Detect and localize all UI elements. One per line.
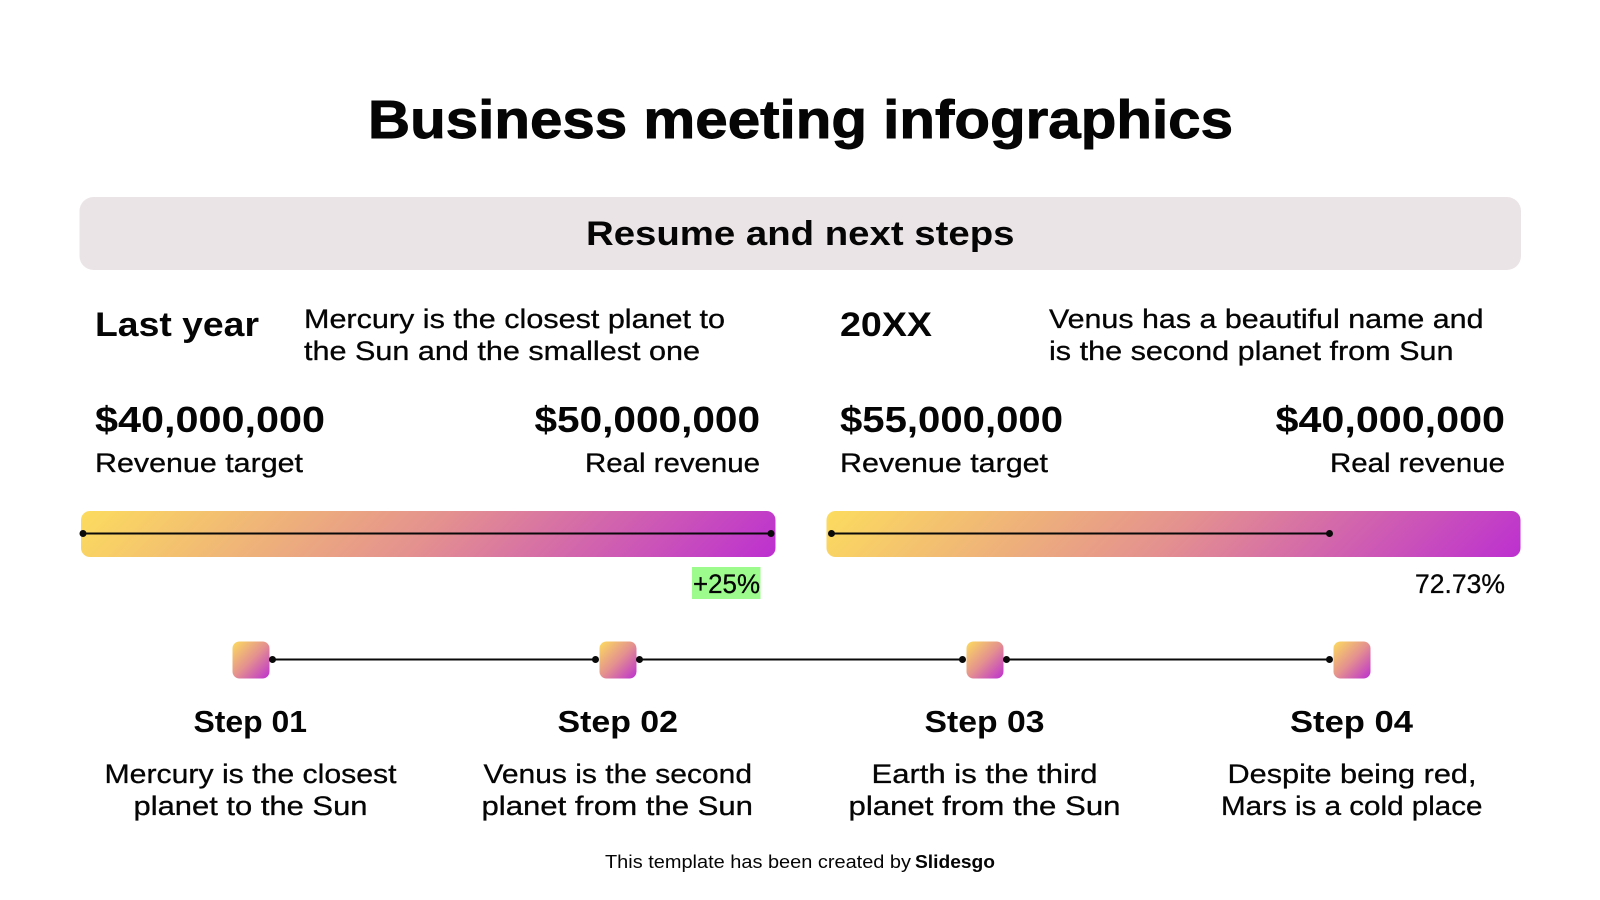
text: 20XX description (1049, 304, 1484, 366)
stat: real revenue (1276, 399, 1505, 478)
title: Business meeting infographics (368, 90, 1233, 150)
step 02: planet from the Sun (482, 791, 753, 821)
panel: last year (80, 304, 776, 599)
stat: revenue target (840, 399, 1063, 478)
text: 20XX description: is the second planet from Sun (1049, 336, 1454, 366)
step 04: Mars is a cold place (1221, 791, 1482, 821)
icon: step 04 marker (1334, 642, 1370, 678)
step 02: Venus is the second (484, 759, 752, 789)
heading: 20XX: 20XX (840, 306, 932, 344)
step 04: Step 04 (1290, 704, 1414, 739)
step 03: Earth is the third (872, 759, 1098, 789)
panel: 20XX (826, 304, 1520, 599)
connector: step 03 to 04 (1003, 656, 1333, 663)
progress bar: 20XX (826, 511, 1520, 557)
step 03 (848, 704, 1120, 821)
timeline: steps connector (232, 642, 1370, 678)
step 01: Step 01 (194, 704, 307, 739)
stat: real revenue: Real revenue (1330, 448, 1505, 478)
text: 20XX description: Venus has a beautiful name and (1049, 304, 1484, 334)
callout: +25%: +25% (693, 569, 760, 599)
step 04 (1221, 704, 1482, 821)
stat: revenue target (95, 399, 325, 478)
connector: step 02 to 03 (636, 656, 966, 663)
text: last year description (304, 304, 725, 366)
stat: revenue target: $40,000,000 (95, 399, 325, 440)
step 03: planet from the Sun (848, 791, 1120, 821)
text: last year description: the Sun and the smallest one (304, 336, 700, 366)
banner heading: Resume and next steps (586, 215, 1014, 253)
step 03: Step 03 (924, 704, 1044, 739)
stat: real revenue (534, 399, 760, 478)
connector: step 01 to 02 (269, 656, 599, 663)
stat: revenue target: Revenue target (840, 448, 1049, 478)
panel: section banner (80, 197, 1521, 270)
footer credit: This template has been created by (605, 852, 911, 872)
progress bar: last year (80, 511, 776, 557)
step 01: Mercury is the closest (104, 759, 397, 789)
step 04: Despite being red, (1228, 759, 1476, 789)
stat: real revenue: Real revenue (585, 448, 760, 478)
heading: last year: Last year (95, 306, 259, 344)
callout: 72.73%: 72.73% (1415, 569, 1505, 599)
stat: real revenue: $40,000,000 (1276, 399, 1505, 440)
footer credit: Slidesgo (915, 852, 995, 872)
step 01 (104, 704, 397, 821)
stat: real revenue: $50,000,000 (534, 399, 760, 440)
text: last year description: Mercury is the closest planet to (304, 304, 725, 334)
icon: step 01 marker (232, 642, 270, 678)
icon: step 02 marker (600, 642, 636, 678)
stat: revenue target: $55,000,000 (840, 399, 1063, 440)
icon: step 03 marker (966, 642, 1004, 678)
step 01: planet to the Sun (134, 791, 368, 821)
step 02: Step 02 (558, 704, 678, 739)
step 02 (482, 704, 753, 821)
stat: revenue target: Revenue target (95, 448, 304, 478)
